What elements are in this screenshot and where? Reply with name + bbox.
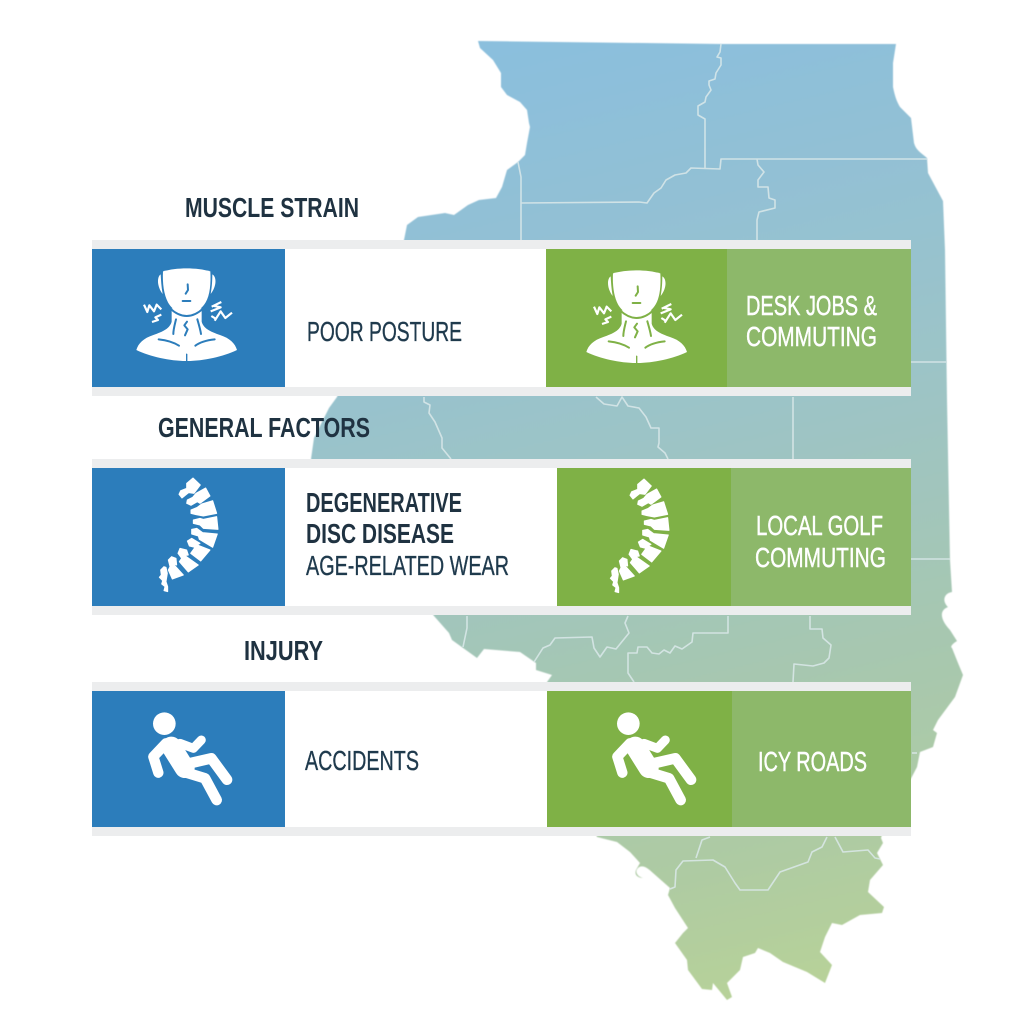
label: desk jobs and commuting: DESK JOBS &	[746, 290, 877, 321]
row: injury	[92, 682, 911, 836]
label: local golf commuting: COMMUTING	[755, 542, 886, 573]
heading: general factors: GENERAL FACTORS	[158, 412, 370, 443]
label: degenerative disc disease	[306, 487, 509, 581]
icon: spine (blue)	[159, 478, 218, 592]
icon: falling person (green)	[617, 712, 691, 800]
icon: falling person (blue)	[153, 712, 227, 800]
row: muscle strain	[92, 240, 911, 396]
label: local golf commuting: LOCAL GOLF	[756, 510, 883, 541]
label: degenerative disc disease: DEGENERATIVE	[306, 487, 462, 518]
county lines	[424, 44, 950, 890]
icon: spine (green)	[610, 479, 669, 593]
label: desk jobs and commuting	[746, 290, 877, 352]
state map	[311, 41, 963, 1000]
heading: injury: INJURY	[244, 635, 323, 666]
label: local golf commuting	[755, 510, 886, 573]
label: icy roads: ICY ROADS	[758, 746, 867, 777]
label: accidents: ACCIDENTS	[305, 745, 419, 776]
heading: muscle strain: MUSCLE STRAIN	[185, 192, 359, 223]
icon: neck pain (green)	[586, 270, 687, 363]
label: poor posture: POOR POSTURE	[307, 316, 462, 347]
label: degenerative disc disease: AGE-RELATED WEAR	[306, 550, 509, 581]
label: degenerative disc disease: DISC DISEASE	[306, 518, 454, 549]
row: general factors	[92, 459, 911, 615]
icon: neck pain (blue)	[136, 268, 237, 361]
label: desk jobs and commuting: COMMUTING	[746, 321, 877, 352]
